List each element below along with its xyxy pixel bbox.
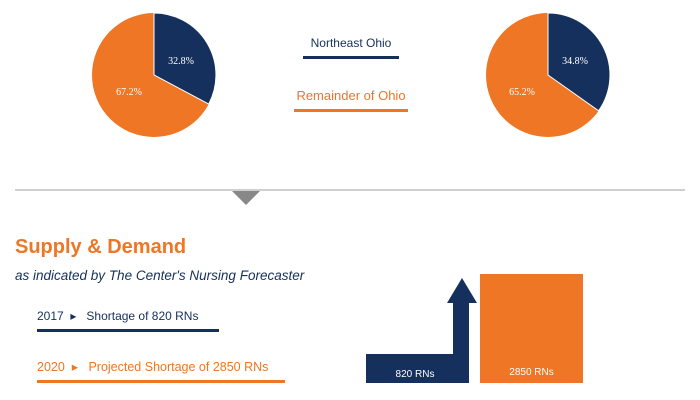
pie chart: right: 65.2% [509, 87, 535, 98]
legend: Remainder of Ohio [294, 88, 408, 112]
pie chart: right: 34.8% [562, 56, 588, 67]
legend: Northeast Ohio: Northeast Ohio [311, 36, 391, 50]
2017 line: 2017 ▸ Shortage of 820 RNs [37, 309, 198, 323]
divider arrow [232, 191, 260, 205]
2020 line [37, 360, 285, 383]
arrow: 820 RNs: 820 RNs [396, 369, 434, 380]
2020 line: 2020 ▸ Projected Shortage of 2850 RNs [37, 360, 268, 374]
pie chart: left: 67.2% [116, 87, 142, 98]
subtitle: as indicated by The Center's Nursing Forecaster [15, 268, 304, 283]
2017 line [37, 309, 219, 332]
title: Supply & Demand [15, 236, 186, 258]
pie chart: right [486, 13, 610, 137]
pie chart: left: 32.8% [168, 56, 194, 67]
box: 2850 RNs: 2850 RNs [509, 367, 554, 378]
pie chart: left [92, 13, 216, 137]
arrow: 820 RNs [366, 278, 477, 383]
legend: Remainder of Ohio: Remainder of Ohio [296, 88, 406, 103]
box: 2850 RNs [480, 274, 583, 383]
legend: Northeast Ohio [303, 36, 399, 59]
